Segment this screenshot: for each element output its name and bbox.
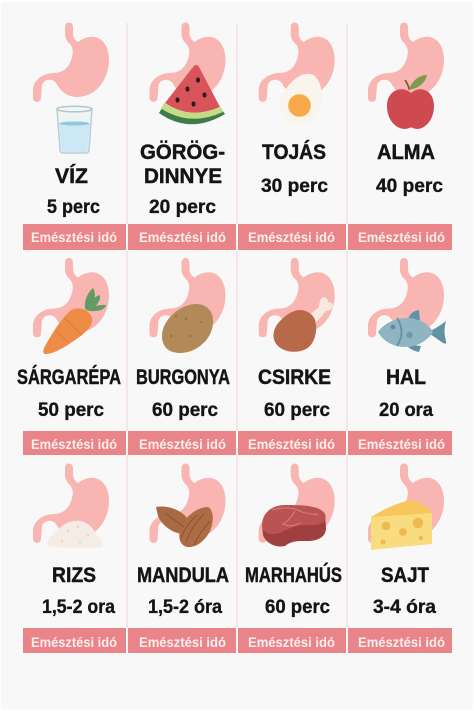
time: 30 perc [261,175,328,197]
stomach [33,258,109,337]
time: 5 perc [47,196,100,218]
icon: cheese [371,500,432,550]
label bar [238,431,346,455]
stomach [150,22,226,102]
stomach [33,22,109,102]
panel: tojás [238,22,346,250]
panel: mandula [128,464,236,653]
panel: rizs [23,464,126,653]
time: 20 perc [149,196,216,218]
icon: egg [280,74,322,126]
time: 3-4 óra [373,596,436,618]
panel: víz [23,22,126,250]
name: SÁRGARÉPA [17,366,121,389]
panel: görögdinnye [128,22,236,250]
icon: glass of water [57,106,92,153]
icon: carrot [43,288,106,354]
icon: rice [47,521,103,548]
label bar [348,628,452,653]
label bar [238,224,346,250]
name: BURGONYA [136,366,230,389]
label bar [128,431,236,455]
stomach [259,22,335,102]
icon: beef [262,505,326,547]
time: 40 perc [376,175,443,197]
name: MANDULA [137,564,229,587]
label bar [348,224,452,250]
time: 60 perc [264,399,330,421]
time: 20 ora [379,399,433,421]
icon: fish [378,310,446,352]
label bar [348,431,452,455]
icon: almonds [156,506,213,547]
label bar: Emésztési idó [358,229,445,245]
label bar: Emésztési idó [139,436,226,452]
stomach [259,464,335,543]
name: GÖRÖG- [140,141,225,164]
label bar: Emésztési idó [248,229,335,245]
label bar: Emésztési idó [139,229,226,245]
name: ALMA [377,141,435,164]
stomach [259,258,335,337]
label bar: Emésztési idó [31,634,117,650]
name: HAL [386,366,426,389]
column dividers [127,23,347,628]
panel: alma [348,22,452,250]
label bar: Emésztési idó [358,436,445,452]
name: SAJT [381,564,429,587]
name: DINNYE [144,165,222,188]
stomach [150,258,226,337]
panel: sárgarépa [17,258,126,455]
time: 50 perc [38,399,104,421]
panel: csirke [238,258,346,455]
panel: sajt [348,464,452,653]
label bar: Emésztési idó [31,436,117,452]
name: MARHAHÚS [245,563,342,587]
time: 60 perc [265,596,330,618]
icon: potato [162,304,213,353]
time: 60 perc [152,399,218,421]
label bar [23,224,126,250]
label bar [23,628,126,653]
icon: apple [387,75,434,129]
icon: watermelon [159,65,225,124]
panel: hal [348,258,452,455]
label bar: Emésztési idó [248,634,335,650]
name: RIZS [52,564,96,587]
label bar: Emésztési idó [248,436,335,452]
label bar [128,224,236,250]
label bar: Emésztési idó [31,229,117,245]
panel: marhahús [238,464,346,653]
stomach [33,464,109,543]
time: 1,5-2 ora [42,596,115,618]
stomach [368,258,444,337]
label bar [23,431,126,455]
label bar: Emésztési idó [139,634,226,650]
name: TOJÁS [262,141,326,164]
panel: burgonya [128,258,236,455]
stomach [368,464,444,543]
label bar: Emésztési idó [358,634,445,650]
stomach [150,464,226,543]
label bar [238,628,346,653]
label bar [128,628,236,653]
stomach [368,22,444,102]
name: VÍZ [55,165,88,188]
name: CSIRKE [258,366,331,389]
icon: chicken leg [273,297,333,352]
time: 1,5-2 óra [148,596,222,618]
